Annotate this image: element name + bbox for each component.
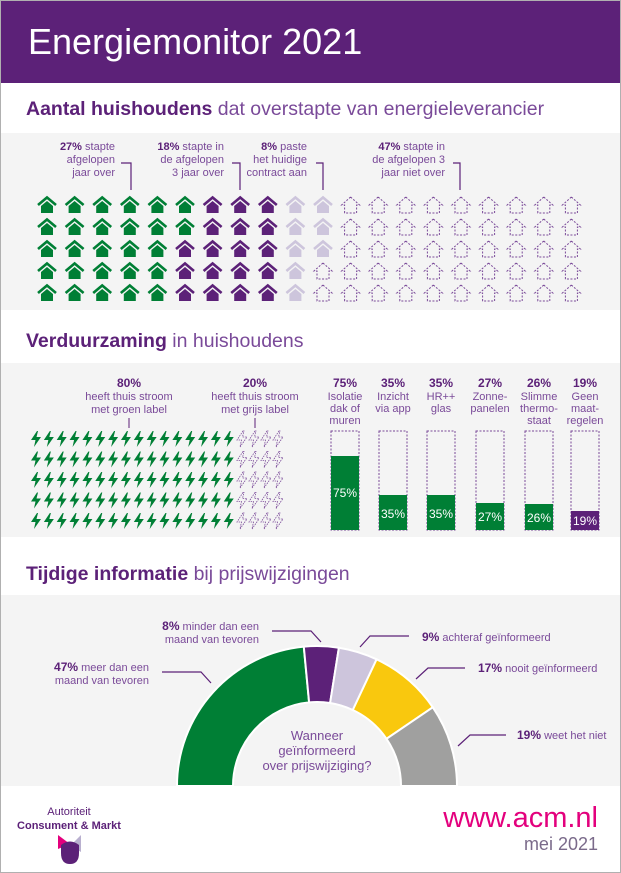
bar: thermostaat 26%: Slimme (521, 391, 557, 403)
bar: HR++ 35% (427, 376, 455, 530)
bar: geen 19%: Geen (572, 391, 598, 403)
bar: thermostaat 26%: 26% (527, 376, 551, 390)
callout: 17% (416, 661, 597, 679)
panel: price change info (1, 595, 620, 786)
bar: inzicht 35%: via app (375, 403, 411, 415)
callout: 19% (458, 728, 606, 746)
callout: 47% (372, 141, 460, 190)
callout: 8%: 8% paste (261, 141, 307, 153)
label: 80% green (85, 376, 173, 428)
callout: 27%: jaar over (71, 167, 115, 179)
bar: HR++ 35%: HR++ (427, 391, 455, 403)
bar: thermostaat 26%: 26% (527, 511, 551, 525)
bar: geen 19%: 19% (573, 376, 597, 390)
callout: 8% (162, 619, 321, 646)
bar: zonnepanelen 27%: panelen (470, 403, 510, 415)
callout: 8%: maand van tevoren (165, 634, 259, 646)
heading: sustainability: Verduurzaming in huishoudens (26, 330, 304, 352)
bar: zonnepanelen 27%: 27% (478, 376, 502, 390)
callout: 47%: 47% meer dan een (54, 660, 149, 674)
bar chart: measures (328, 376, 603, 530)
callout: 18%: de afgelopen (160, 154, 224, 166)
donut centre text (262, 728, 372, 773)
footer logo: ACM (17, 806, 121, 864)
callout: 47% (54, 660, 211, 687)
callout: 17%: 17% nooit geïnformeerd (478, 661, 597, 675)
bar: isolatie 75%: 75% (333, 376, 357, 390)
bar: HR++ 35%: 35% (429, 376, 453, 390)
callout: 9% (360, 630, 551, 647)
bar: geen 19%: maat- (571, 403, 599, 415)
label: 80% green: heeft thuis stroom (85, 391, 173, 403)
bar: HR++ 35%: 35% (429, 507, 453, 521)
header band (0, 0, 621, 83)
bar: zonnepanelen 27%: 27% (478, 510, 502, 524)
footer: url and date (442, 802, 598, 854)
donut centre text: over prijswijziging? (262, 758, 372, 773)
label: 20% grey (211, 376, 299, 428)
callout: 18%: 18% stapte in (157, 141, 224, 153)
bar: thermostaat 26%: thermo- (520, 403, 558, 415)
donut centre text: geïnformeerd (278, 743, 356, 758)
callout: 8%: het huidige (253, 154, 307, 166)
callout: 47%: jaar niet over (380, 167, 445, 179)
bar: thermostaat 26%: staat (527, 415, 551, 427)
bar: inzicht 35% (375, 376, 411, 530)
panel: switching households (1, 133, 620, 310)
bar: geen 19% (567, 376, 603, 530)
label: 20% grey: met grijs label (221, 404, 289, 416)
callout: 8%: 8% minder dan een (162, 619, 259, 633)
label: 20% grey: heeft thuis stroom (211, 391, 299, 403)
footer logo: ACM: Consument & Markt (17, 820, 121, 832)
label: 80% green: met groen label (91, 404, 167, 416)
callout: 8%: contract aan (246, 167, 307, 179)
callout: 47%: maand van tevoren (55, 675, 149, 687)
bar: thermostaat 26% (520, 376, 558, 530)
icon: logo mark (58, 835, 81, 864)
footer: url and date: www.acm.nl (442, 802, 598, 834)
bar: HR++ 35%: glas (431, 403, 452, 415)
bar: isolatie 75%: Isolatie (328, 391, 362, 403)
bar: zonnepanelen 27%: Zonne- (473, 391, 508, 403)
house grid (38, 197, 580, 301)
heading: timely information: Tijdige informatie bij prijswijzigingen (26, 563, 350, 585)
title: Energiemonitor 2021 (28, 21, 362, 62)
callout: 27%: 27% stapte (60, 141, 115, 153)
label: 20% grey: 20% (243, 376, 267, 390)
callout: 47%: de afgelopen 3 (372, 154, 445, 166)
bar: isolatie 75%: dak of (330, 403, 361, 415)
bar: geen 19%: regelen (567, 415, 603, 427)
callout: 18%: 3 jaar over (172, 167, 224, 179)
bar: geen 19%: 19% (573, 514, 597, 528)
bar: inzicht 35%: Inzicht (377, 391, 409, 403)
donut chart (177, 646, 457, 786)
donut centre text: Wanneer (291, 728, 344, 743)
bar: inzicht 35%: 35% (381, 376, 405, 390)
label: 80% green: 80% (117, 376, 141, 390)
bar: isolatie 75% (328, 376, 362, 530)
callout: 27% (60, 141, 131, 190)
callout: 19%: 19% weet het niet (517, 728, 606, 742)
callout: 8% (246, 141, 323, 190)
bar: isolatie 75%: 75% (333, 486, 357, 500)
panel: sustainability (1, 363, 620, 537)
bar: inzicht 35%: 35% (381, 507, 405, 521)
callout: 9%: 9% achteraf geïnformeerd (422, 630, 551, 644)
lightning grid (31, 431, 283, 529)
bar: zonnepanelen 27% (470, 376, 510, 530)
callout: 27%: afgelopen (67, 154, 115, 166)
bar: isolatie 75%: muren (329, 415, 361, 427)
footer: url and date: mei 2021 (524, 834, 598, 854)
callout: 47%: 47% stapte in (378, 141, 445, 153)
callout: 18% (157, 141, 240, 190)
footer logo: ACM: Autoriteit (47, 806, 91, 818)
heading: switching households: Aantal huishoudens dat overstapte van energieleverancier (26, 98, 545, 120)
